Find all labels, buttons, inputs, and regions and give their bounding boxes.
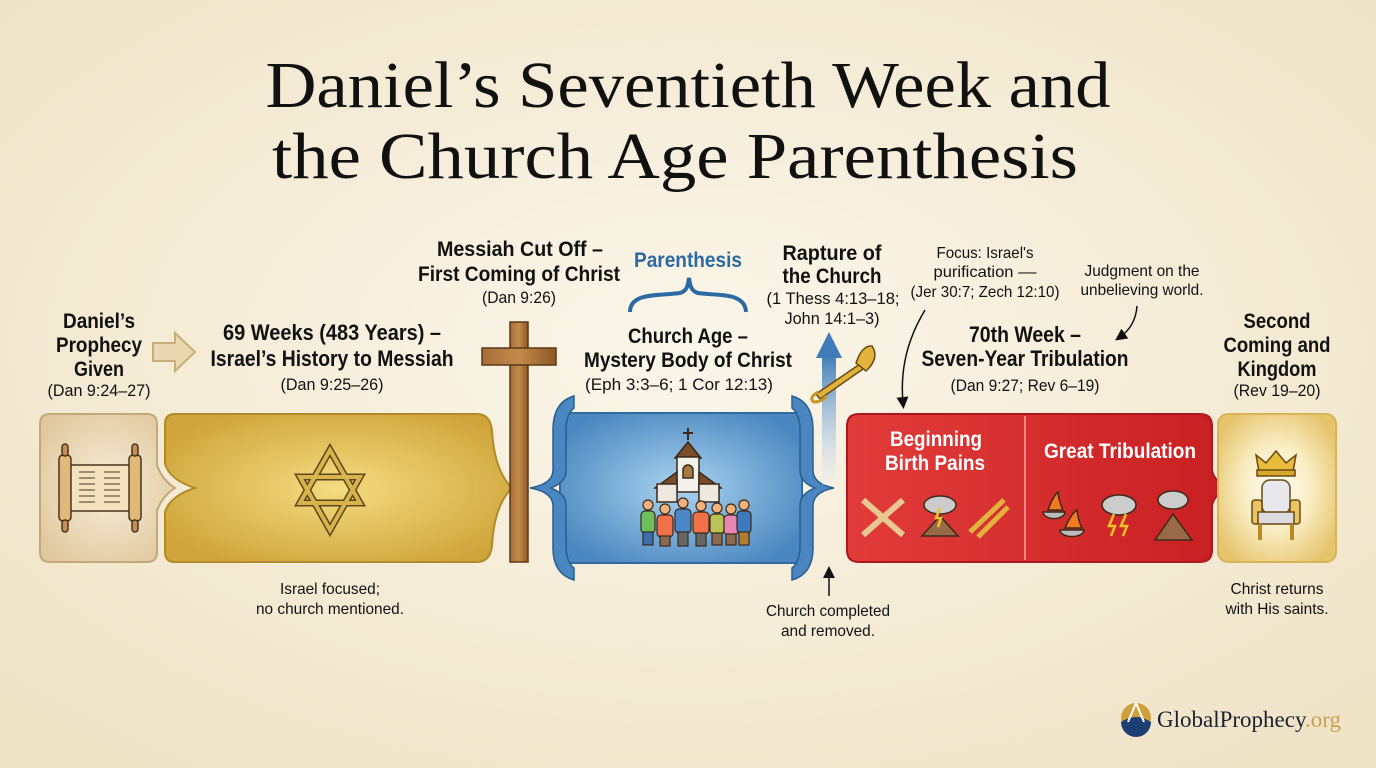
text: church completed: and removed.: [781, 623, 875, 640]
icons: birth pains: [863, 496, 1008, 537]
text: Israel focused: [256, 581, 404, 618]
label: 69 weeks: (Dan 9:25–26): [280, 375, 384, 394]
label: 69 weeks: 69 Weeks (483 Years) –: [223, 320, 441, 345]
callout: focus on Israel: Focus: Israel's: [936, 245, 1034, 262]
label: second coming: [1224, 310, 1330, 400]
text: Israel focused: no church mentioned.: [256, 601, 404, 618]
label: church age: [584, 325, 792, 394]
text: church completed: [766, 572, 890, 640]
text: Christ returns: with His saints.: [1225, 601, 1328, 618]
label: beginning birth pains: Birth Pains: [885, 452, 985, 475]
icons: great tribulation: [1043, 491, 1192, 540]
label: Daniel's prophecy given: (Dan 9:24–27): [48, 381, 150, 400]
icon: star of David: [300, 450, 360, 530]
text: Christ returns: [1225, 581, 1328, 618]
logo: GlobalProphecy.org: [1157, 707, 1341, 732]
label: beginning birth pains: [885, 428, 985, 475]
label: Daniel's prophecy given: Daniel’s: [63, 310, 135, 333]
icon: throne with crown: [1252, 451, 1300, 540]
label: beginning birth pains: Beginning: [890, 428, 982, 451]
label: rapture: the Church: [782, 265, 882, 288]
label: Daniel's prophecy given: Given: [74, 358, 124, 381]
label: Messiah cut off: (Dan 9:26): [482, 288, 556, 307]
icon: church with people: [641, 428, 751, 546]
callout: judgment: Judgment on the: [1084, 263, 1200, 280]
callout: judgment: unbelieving world.: [1080, 282, 1204, 299]
label: 70th week: 70th Week –: [969, 322, 1081, 347]
label: parenthesis with brace: Parenthesis: [634, 249, 742, 272]
label: 70th week: [922, 322, 1128, 395]
label: second coming: Coming and: [1224, 334, 1330, 357]
label: great tribulation: Great Tribulation: [1044, 440, 1196, 463]
label: 70th week: Seven-Year Tribulation: [922, 346, 1128, 371]
label: 70th week: (Dan 9:27; Rev 6–19): [950, 376, 1100, 395]
label: rapture: [766, 242, 900, 328]
callout: focus on Israel: purification ––: [934, 264, 1037, 281]
label: parenthesis with brace: [630, 249, 746, 312]
title: [266, 49, 1110, 193]
icon: cross: [482, 322, 556, 562]
label: church age: Mystery Body of Christ: [584, 349, 792, 372]
label: 69 weeks: Israel’s History to Messiah: [210, 346, 454, 371]
label: Messiah cut off: Messiah Cut Off –: [437, 238, 603, 261]
label: rapture: Rapture of: [782, 242, 882, 265]
label: rapture: John 14:1–3): [784, 309, 880, 328]
panel: church age blue: [530, 396, 834, 580]
callout: judgment: [1080, 263, 1204, 337]
label: rapture: (1 Thess 4:13–18;: [766, 289, 900, 308]
label: 69 weeks: [210, 320, 454, 394]
arrow: rapture upward: [816, 332, 842, 485]
panel: 70th week red: [847, 414, 1229, 562]
icon: scroll: [59, 444, 141, 532]
text: Christ returns: Christ returns: [1230, 581, 1324, 598]
label: Daniel's prophecy given: Prophecy: [56, 334, 142, 357]
label: Daniel's prophecy given: [48, 310, 150, 400]
panel: scroll: [40, 414, 175, 562]
panel: 69 weeks gold banner: [165, 414, 512, 562]
title: Daniel’s Seventieth Week and: [266, 49, 1110, 122]
panel: second coming: [1218, 414, 1336, 562]
callout: focus on Israel: (Jer 30:7; Zech 12:10): [910, 284, 1060, 301]
label: church age: (Eph 3:3–6; 1 Cor 12:13): [585, 375, 773, 394]
label: second coming: Kingdom: [1238, 358, 1316, 381]
label: second coming: (Rev 19–20): [1234, 381, 1320, 400]
label: church age: Church Age –: [628, 325, 748, 348]
callout: focus on Israel: [902, 245, 1060, 403]
label: second coming: Second: [1244, 310, 1310, 333]
text: church completed: Church completed: [766, 603, 890, 620]
arrow: prophecy to 69 weeks: [153, 333, 195, 371]
label: Messiah cut off: First Coming of Christ: [418, 263, 620, 286]
icon: trumpet: [812, 346, 875, 402]
label: Messiah cut off: [418, 238, 620, 307]
logo: [1121, 703, 1341, 737]
title: the Church Age Parenthesis: [272, 120, 1078, 193]
text: Israel focused: Israel focused;: [280, 581, 380, 598]
